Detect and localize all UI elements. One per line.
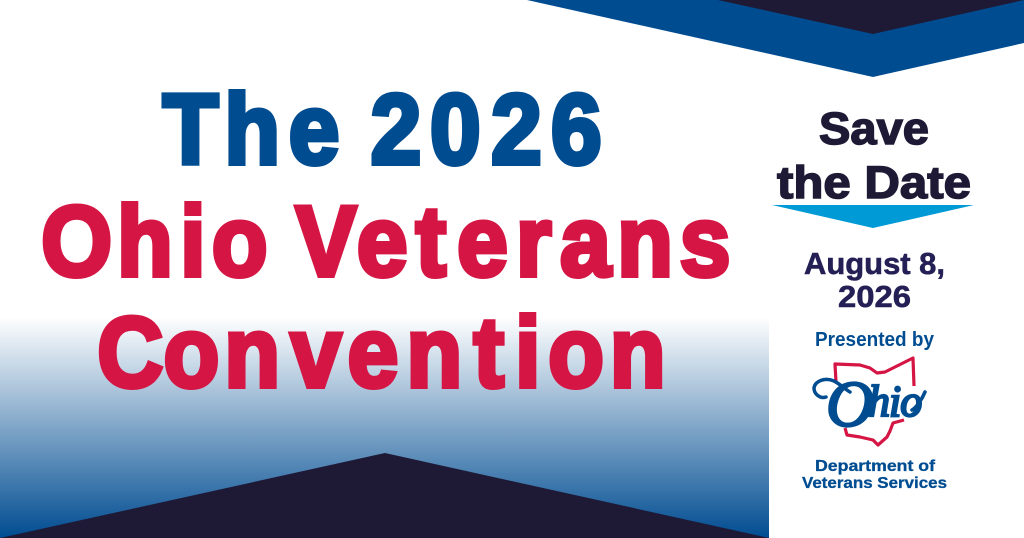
event date: 2026 — [838, 279, 911, 314]
top dark chevron — [718, 0, 1024, 34]
event date: August 8, — [804, 246, 945, 281]
department name — [802, 458, 947, 492]
logo wordmark: hio — [868, 377, 921, 426]
title line 1: The 2026 — [163, 75, 602, 185]
icon: Ohio state outline — [835, 358, 914, 445]
event date — [804, 246, 945, 314]
logo swash — [814, 379, 925, 410]
department name: Veterans Services — [802, 475, 947, 492]
title line 3: Convention — [97, 298, 665, 408]
title line 2: Ohio Veterans — [41, 187, 730, 297]
logo wordmark: O — [826, 368, 874, 441]
bottom dark chevron — [0, 453, 769, 538]
department name: Department of — [815, 458, 936, 475]
top blue chevron — [527, 0, 1024, 77]
light blue arrow — [772, 205, 974, 228]
save the date heading — [777, 103, 971, 208]
save the date heading: Save — [819, 103, 929, 154]
Ohio logo — [814, 358, 925, 445]
gradient background panel — [0, 317, 769, 538]
presented by: Presented by — [815, 329, 935, 351]
title — [41, 75, 730, 408]
save the date heading: the Date — [777, 157, 971, 208]
